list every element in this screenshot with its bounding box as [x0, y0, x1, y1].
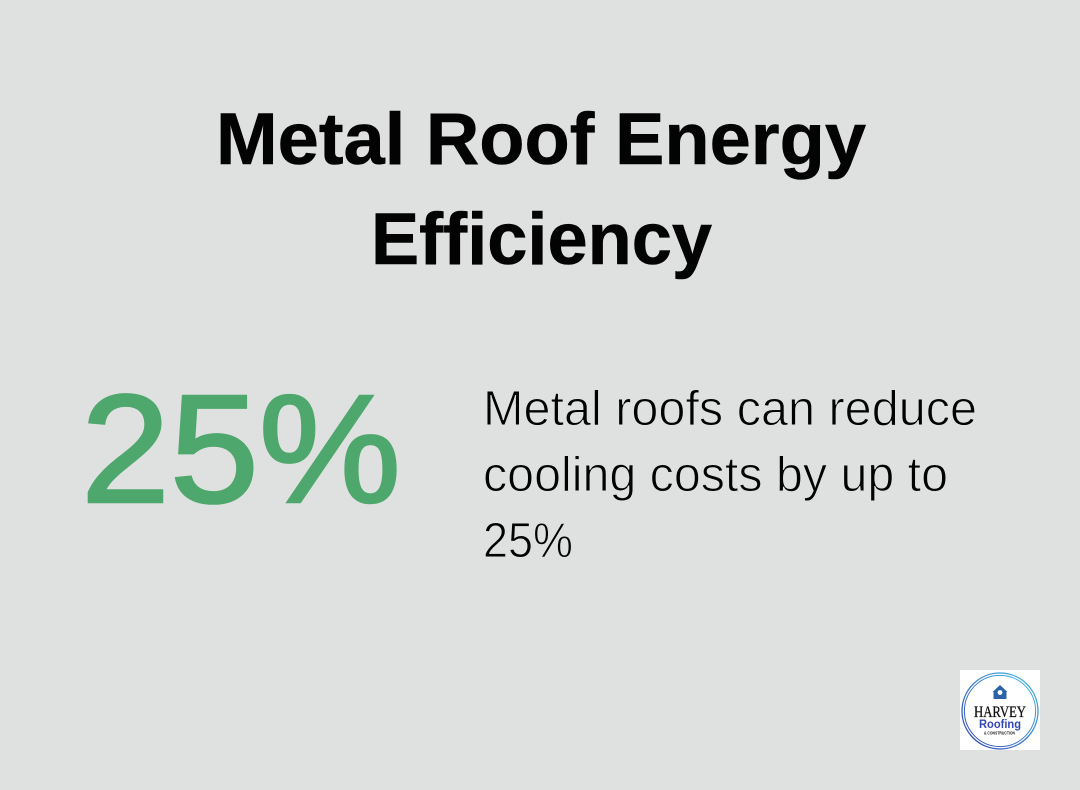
description text: cooling costs by up to	[483, 448, 948, 502]
logo wordmark: & CONSTRUCTION	[984, 730, 1015, 736]
description text: Metal roofs can reduce	[483, 382, 977, 436]
logo wordmark: HARVEY	[974, 704, 1026, 721]
logo ring	[962, 673, 1038, 749]
logo: Harvey Roofing	[960, 670, 1040, 750]
logo wordmark	[974, 704, 1026, 736]
title: Metal Roof Energy	[216, 99, 866, 180]
title: Efficiency	[371, 199, 712, 280]
title	[216, 99, 866, 280]
logo wordmark: Roofing	[979, 717, 1021, 731]
description text	[483, 382, 977, 568]
logo house icon	[992, 685, 1008, 699]
description text: 25%	[483, 514, 573, 568]
statistic: 25%: 25%	[81, 363, 401, 535]
